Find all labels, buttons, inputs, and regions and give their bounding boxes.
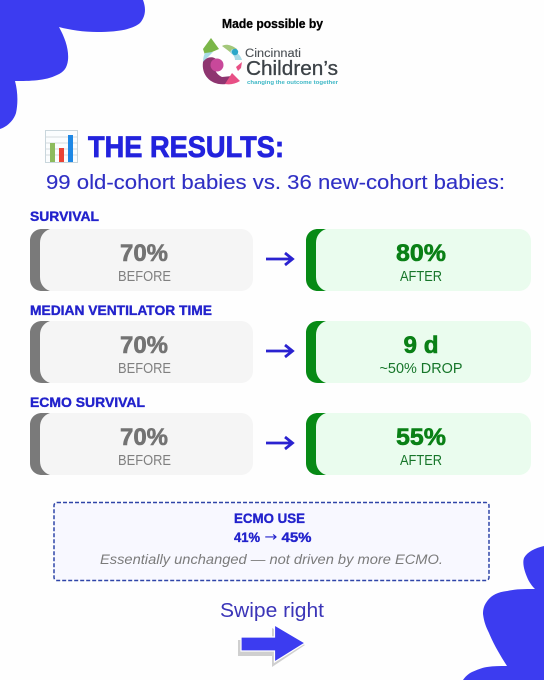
panel: ecmo after [306, 413, 531, 475]
panel: survival before [30, 229, 253, 291]
arrow: ecmo [266, 437, 292, 449]
panel: survival before: 70% [120, 240, 168, 267]
panel: survival after [306, 229, 531, 291]
panel: ventilator after [306, 321, 531, 383]
panel: survival after: 80% [396, 240, 446, 267]
callout: ecmo use: Essentially unchanged — not driven by more ECMO. [100, 552, 443, 567]
sponsor line: Made possible by [222, 17, 323, 31]
panel: ecmo before: 70% [120, 424, 168, 451]
panel: ventilator after: ~50% DROP [380, 361, 462, 377]
callout: ecmo use: ECMO USE [234, 510, 305, 526]
icon: bar chart emoji [46, 130, 78, 162]
callout: ecmo use: → [264, 530, 278, 545]
logo: Cincinnati Children's [203, 38, 339, 86]
heading: ecmo survival: ECMO SURVIVAL [30, 395, 145, 410]
heading: survival: SURVIVAL [30, 209, 99, 224]
callout: ecmo use [54, 502, 489, 580]
panel: ecmo after: AFTER [400, 453, 442, 469]
panel: ventilator after: 9 d [404, 332, 438, 359]
panel: ecmo after: 55% [396, 424, 446, 451]
panel: ventilator before [30, 321, 253, 383]
heading: median ventilator time: MEDIAN VENTILATOR TIME [30, 303, 212, 318]
arrow: survival [266, 253, 292, 265]
logo: Cincinnati Children's: Children’s [246, 58, 338, 80]
arrow: ventilator [266, 345, 292, 357]
arrow: swipe right [238, 625, 305, 667]
panel: ventilator before: BEFORE [118, 361, 171, 377]
panel: survival after: AFTER [400, 269, 442, 285]
subtitle: 99 old-cohort babies vs. 36 new-cohort babies: [46, 172, 505, 194]
callout: ecmo use: 45% [282, 529, 312, 545]
panel: ecmo before [30, 413, 253, 475]
panel: survival before: BEFORE [118, 269, 171, 285]
title: THE RESULTS: [88, 131, 284, 164]
panel: ecmo before: BEFORE [118, 453, 171, 469]
logo: Cincinnati Children's: changing the outcome together [247, 80, 339, 86]
swipe label: Swipe right [220, 600, 324, 622]
decorative blob: top left [0, 0, 145, 129]
callout: ecmo use: 41% [234, 529, 261, 545]
panel: ventilator before: 70% [120, 332, 168, 359]
logo: Cincinnati Children's: Cincinnati [245, 48, 301, 60]
decorative blob: bottom right [463, 546, 544, 680]
